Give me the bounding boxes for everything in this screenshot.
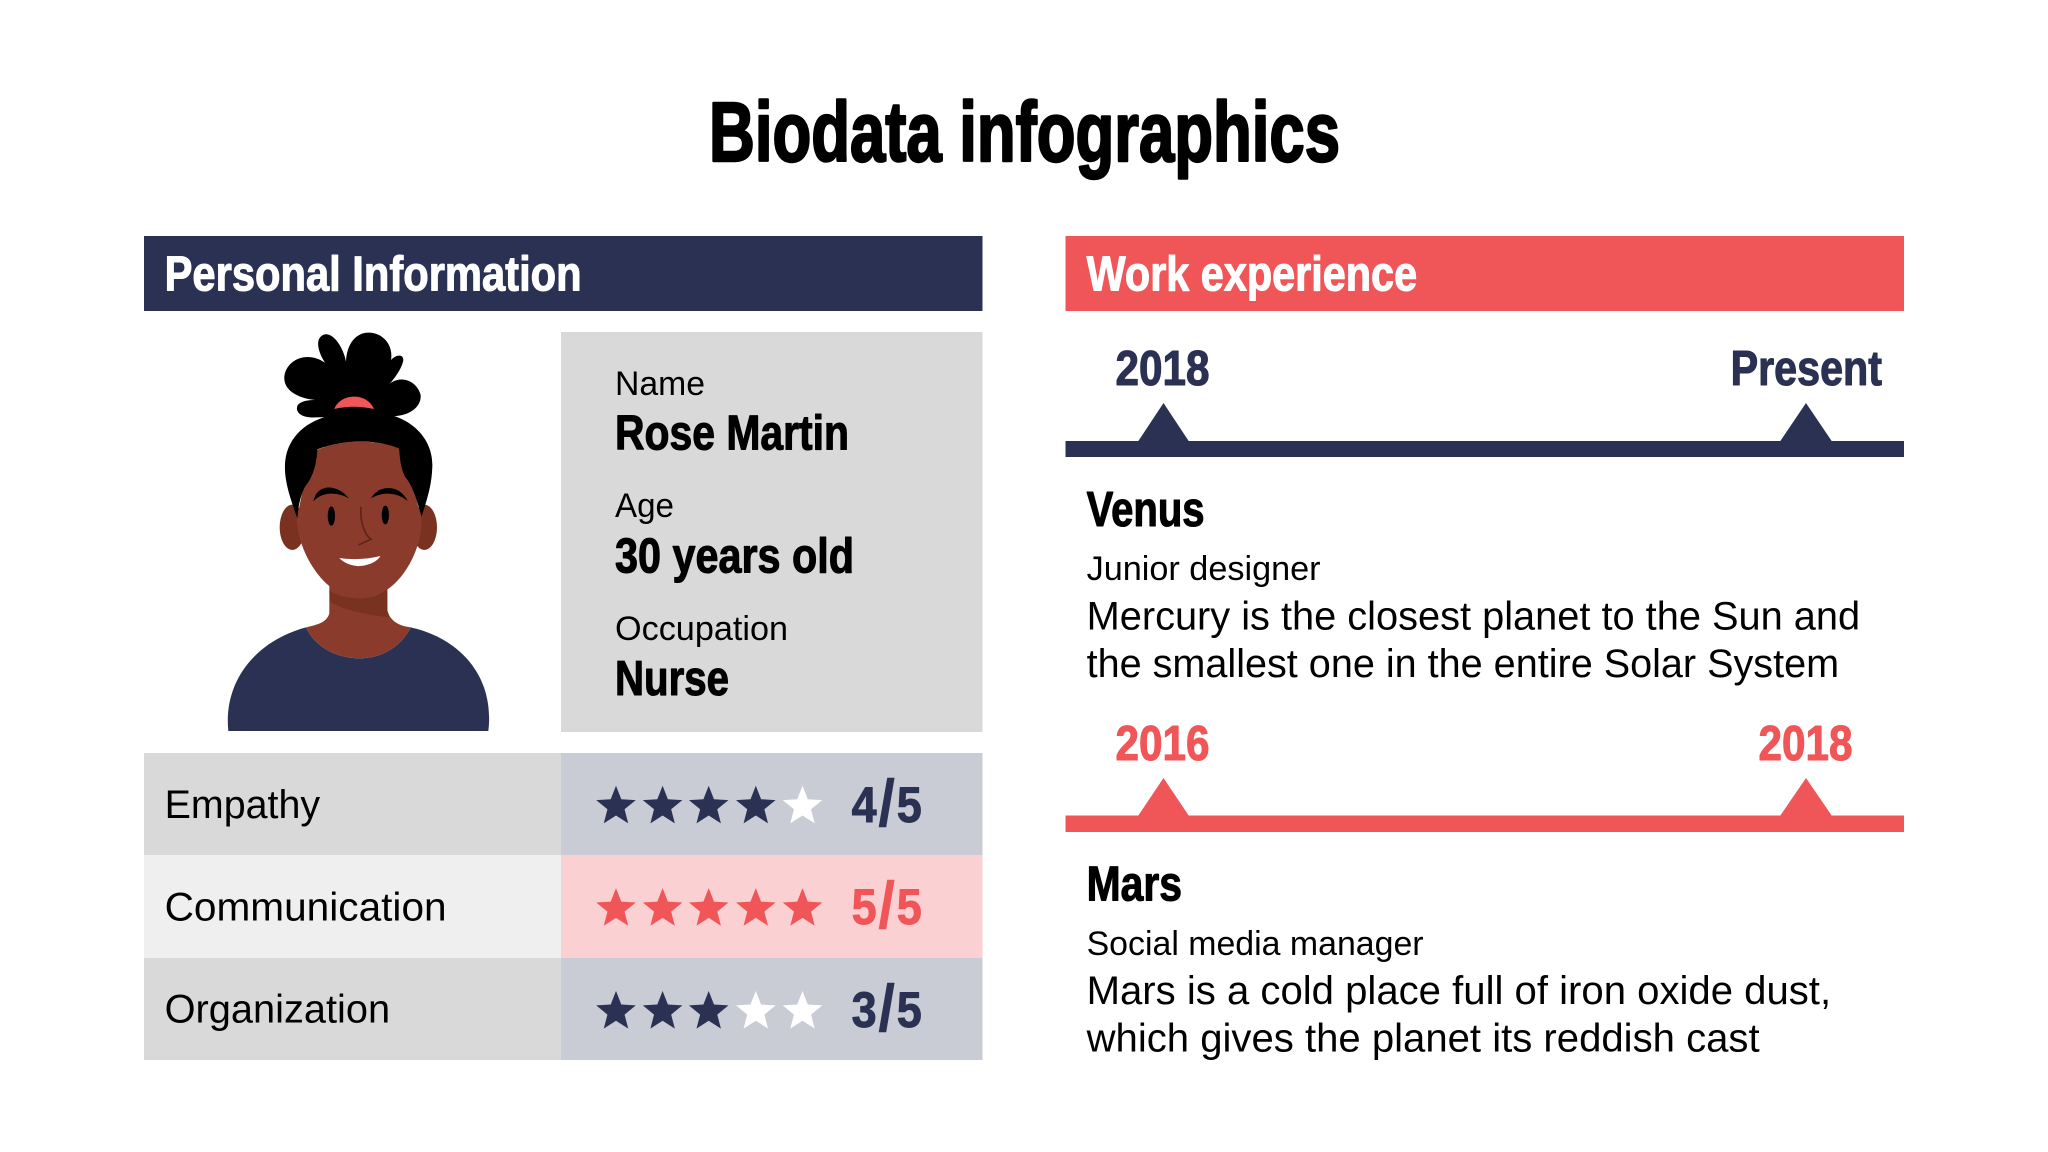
field: age: 30 years old (615, 530, 854, 584)
field: occupation: Nurse (615, 652, 729, 706)
title: Biodata infographics (709, 85, 1340, 179)
row: communication rating: 5 (852, 880, 877, 936)
field: age (615, 487, 854, 584)
job entry: Venus (1087, 483, 1860, 686)
job entry: Venus: Junior designer (1087, 550, 1321, 588)
job entry: Mars: which gives the planet its reddish cast (1086, 1016, 1760, 1060)
job entry: Mars (1086, 858, 1831, 1060)
field: age: Age (615, 487, 674, 525)
job entry: Mars: Mars (1087, 858, 1182, 912)
row: empathy rating: Empathy (165, 783, 320, 827)
row: organization rating: 5 (897, 983, 922, 1039)
timeline: 2016 to 2018: 2016 (1116, 717, 1210, 771)
icon: avatar portrait (228, 333, 489, 731)
job entry: Mars: Social media manager (1087, 925, 1424, 963)
panel: personal details (561, 332, 982, 732)
row: organization rating: Organization (165, 988, 390, 1032)
row: organization rating (144, 958, 982, 1060)
row: communication rating: 5 (897, 880, 922, 936)
panel: work experience (1066, 236, 1904, 1060)
field: name: Name (615, 365, 705, 403)
job entry: Venus: the smallest one in the entire Solar System (1087, 642, 1839, 686)
row: organization rating: 3 (852, 983, 877, 1039)
job entry: Mars: Mars is a cold place full of iron oxide dust, (1087, 969, 1831, 1013)
heading: personal information (144, 236, 982, 311)
row: empathy rating: 5 (897, 778, 922, 834)
row: communication rating (144, 855, 982, 958)
field: name (615, 365, 849, 460)
field: name: Rose Martin (615, 406, 849, 460)
timeline: 2018 to present (1066, 342, 1904, 457)
field: occupation: Occupation (615, 610, 788, 648)
timeline: 2018 to present: Present (1731, 342, 1882, 396)
row: empathy rating: 4 (852, 778, 877, 834)
timeline: 2018 to present: 2018 (1116, 342, 1210, 396)
heading: personal information: Personal Information (165, 248, 582, 302)
row: communication rating: / (878, 869, 895, 943)
heading: work experience: Work experience (1087, 248, 1417, 302)
panel: personal information (144, 236, 982, 1060)
job entry: Venus: Venus (1087, 483, 1205, 537)
row: empathy rating: / (878, 767, 895, 841)
timeline: 2016 to 2018 (1066, 717, 1904, 832)
heading: work experience (1066, 236, 1904, 311)
field: occupation (615, 610, 788, 706)
timeline: 2016 to 2018: 2018 (1758, 717, 1852, 771)
row: empathy rating (144, 753, 982, 855)
row: communication rating: Communication (165, 886, 447, 930)
row: organization rating: / (878, 972, 895, 1046)
job entry: Venus: Mercury is the closest planet to the Sun and (1087, 594, 1860, 638)
